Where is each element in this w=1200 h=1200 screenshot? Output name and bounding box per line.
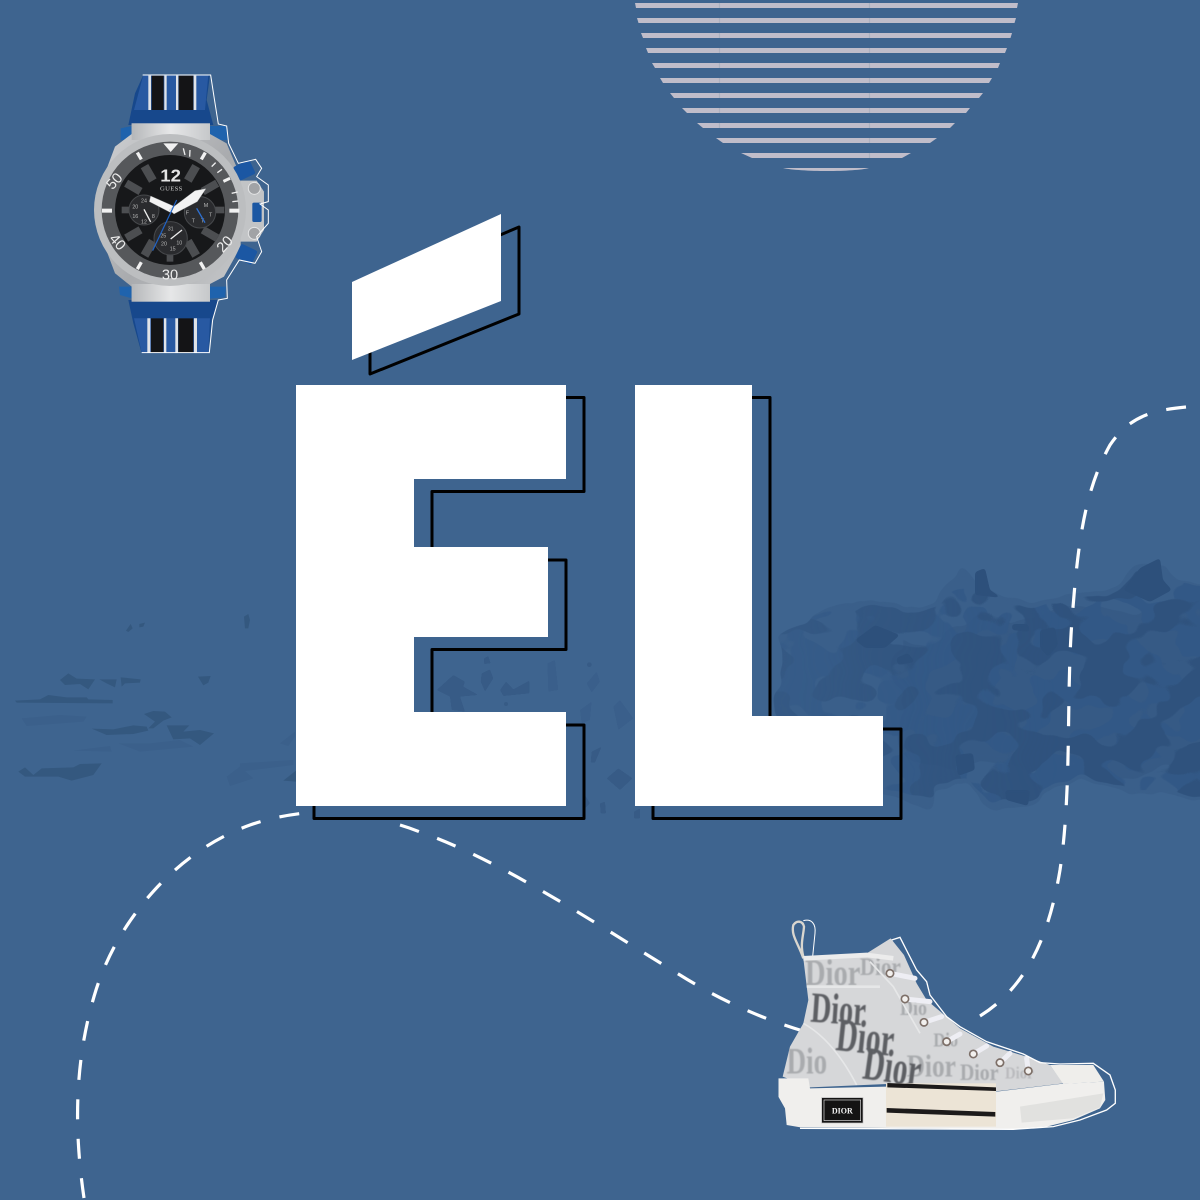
accent shadow outline: [370, 227, 519, 374]
white die-cut outline: [142, 75, 268, 353]
case plates: [132, 123, 210, 302]
cream side patch: [886, 1083, 996, 1127]
watch case: [95, 123, 241, 302]
bezel numerals: 40: [106, 231, 128, 254]
sole detail: [1020, 1093, 1103, 1123]
collar trim: [803, 955, 893, 958]
smear darker core: [900, 600, 1200, 770]
logo monogram pattern: [786, 958, 1034, 1086]
bezel numerals: [104, 170, 237, 283]
bezel numerals: 50: [104, 170, 126, 193]
bezel markers: [102, 143, 239, 270]
letter E shadow outline: [314, 398, 584, 818]
DIOR label: [822, 1098, 863, 1123]
subdials: T: [192, 218, 196, 224]
black stripes: [887, 1083, 996, 1117]
texture: left paint marks: [15, 614, 296, 786]
pale monogram rows: Dior: [960, 1060, 999, 1085]
title: ÉL block lettering: [296, 214, 901, 818]
toe cap: [1050, 1065, 1104, 1084]
bezel: [94, 134, 246, 286]
decorative striped semicircle: [635, 3, 1018, 171]
subdials: 10: [176, 240, 182, 246]
seam lines: [803, 962, 920, 1085]
subdials: M: [204, 203, 208, 209]
brand name: GUESS: [160, 186, 183, 193]
subdials: 20: [132, 204, 138, 210]
subdials: 15: [170, 246, 176, 252]
texture: marks between letters: [437, 656, 640, 818]
subdials: 24: [141, 198, 147, 204]
smear blotches: [850, 572, 1200, 801]
hour indices: [122, 164, 224, 262]
pale monogram rows: Dior: [907, 1049, 956, 1084]
letter E: [296, 385, 566, 806]
pale monogram rows: Dio: [933, 1029, 958, 1051]
icon: wristwatch: [94, 75, 268, 353]
watch strap top: [128, 75, 213, 125]
subdials: F: [186, 210, 190, 216]
crowns: [233, 160, 262, 265]
subdials: 16: [132, 214, 138, 220]
dial numeral 12: 12: [160, 165, 181, 185]
pale monogram rows: Dior: [1005, 1064, 1034, 1083]
subdials: 12: [141, 219, 147, 225]
pale monogram rows: Dior: [860, 953, 901, 982]
subdials: 8: [152, 214, 155, 220]
accent mark: [352, 214, 501, 360]
letter L: [635, 385, 883, 806]
icon: high-top sneaker: [778, 920, 1115, 1129]
watch strap bottom: [128, 300, 218, 353]
subdials: T: [201, 218, 205, 224]
dark monogram rows: Dior: [834, 1008, 897, 1067]
bezel numerals: 20: [214, 233, 237, 256]
pale monogram rows: Dior: [805, 952, 861, 994]
pale monogram rows: Dio: [787, 1040, 827, 1081]
DIOR label: DIOR: [832, 1106, 853, 1115]
dashed path: middle curve to sneaker: [400, 825, 803, 1031]
dashed path: sneaker to top right: [980, 407, 1186, 1016]
bezel numerals: 30: [162, 267, 178, 283]
dial: [115, 155, 225, 265]
tab white outline: [803, 920, 815, 957]
dark monogram rows: [810, 992, 922, 1084]
laces and eyelets: [886, 970, 1032, 1075]
dark monogram rows: Dior: [860, 1037, 925, 1097]
dark monogram rows: Dior: [809, 983, 868, 1035]
watch hands: [149, 189, 206, 251]
subdials: 20: [161, 242, 167, 248]
white die-cut outline: [800, 937, 1115, 1129]
texture: right paint smear: [774, 559, 1200, 806]
subdials: [129, 195, 216, 255]
subdials: 31: [168, 227, 174, 233]
letter L shadow outline: [653, 398, 901, 818]
sneaker upper: [783, 938, 1063, 1092]
pale monogram rows: Dio: [900, 996, 927, 1020]
pale monogram rows: [787, 952, 1034, 1085]
pull tab loop: [793, 922, 804, 958]
subdials: T: [209, 213, 213, 219]
dashed path: left curve: [78, 813, 305, 1198]
subdials: 25: [160, 233, 166, 239]
smear darkest blobs: [855, 558, 1172, 806]
smear base tone: [770, 560, 1200, 810]
right guard and screws: [238, 181, 264, 242]
sole: [778, 1078, 1105, 1129]
watch lugs: [119, 126, 227, 299]
